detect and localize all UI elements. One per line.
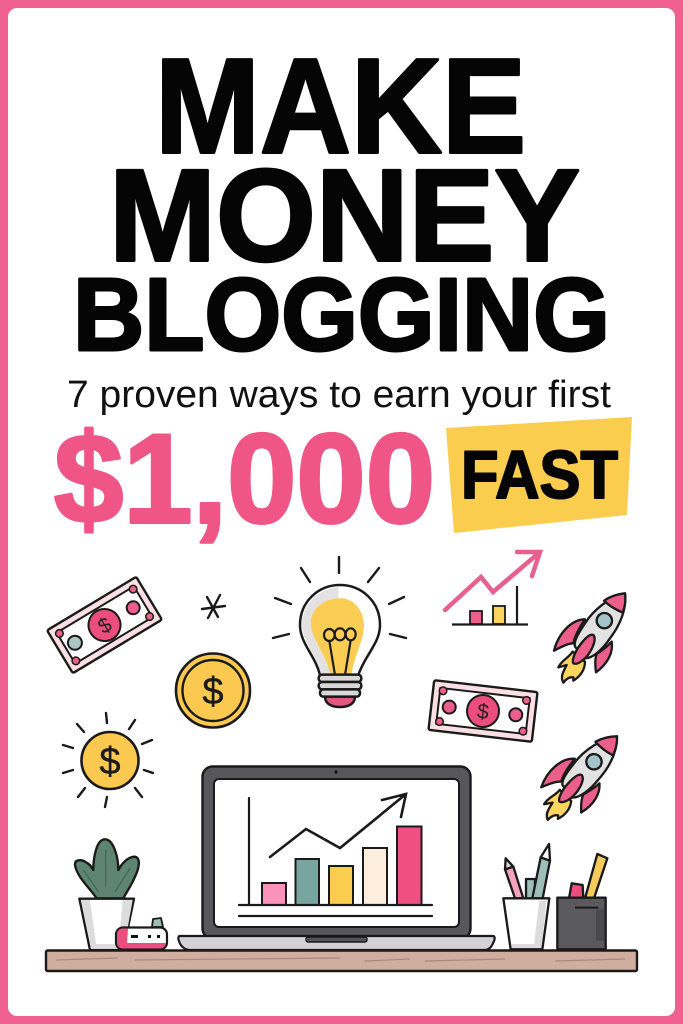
icon: asterisk <box>202 595 225 618</box>
icon: gold coin: $ <box>202 671 224 713</box>
badge: FAST <box>446 417 632 533</box>
title: MONEY <box>109 142 580 288</box>
icon: dollar sun coin <box>63 713 153 807</box>
laptop chart <box>239 794 432 916</box>
desk <box>46 950 637 971</box>
icon: light bulb <box>273 557 406 707</box>
laptop base <box>178 936 495 950</box>
subtitle: 7 proven ways to earn your first <box>67 374 611 416</box>
icon: dollar bill right <box>428 680 538 742</box>
icon: gold coin <box>176 654 250 728</box>
laptop <box>178 766 495 950</box>
badge: FAST: FAST <box>461 437 618 513</box>
icon: dollar bill right: $ <box>476 700 490 724</box>
icon: rocket bottom <box>538 730 617 825</box>
icon: white pen cup <box>503 844 550 949</box>
icon: dollar sun coin: $ <box>99 741 121 783</box>
title: MAKE <box>155 30 526 182</box>
icon: small growth chart <box>445 552 540 624</box>
icon: small device <box>116 918 167 950</box>
title: BLOGGING <box>73 257 610 372</box>
icon: rocket top <box>554 593 625 683</box>
plant <box>75 839 139 950</box>
icon: dollar bill left: $ <box>94 613 116 639</box>
icon: dollar bill left <box>47 577 162 673</box>
icon: dark pen holder <box>557 854 607 949</box>
title <box>73 30 610 372</box>
amount: $1,000: $1,000 <box>54 408 435 550</box>
